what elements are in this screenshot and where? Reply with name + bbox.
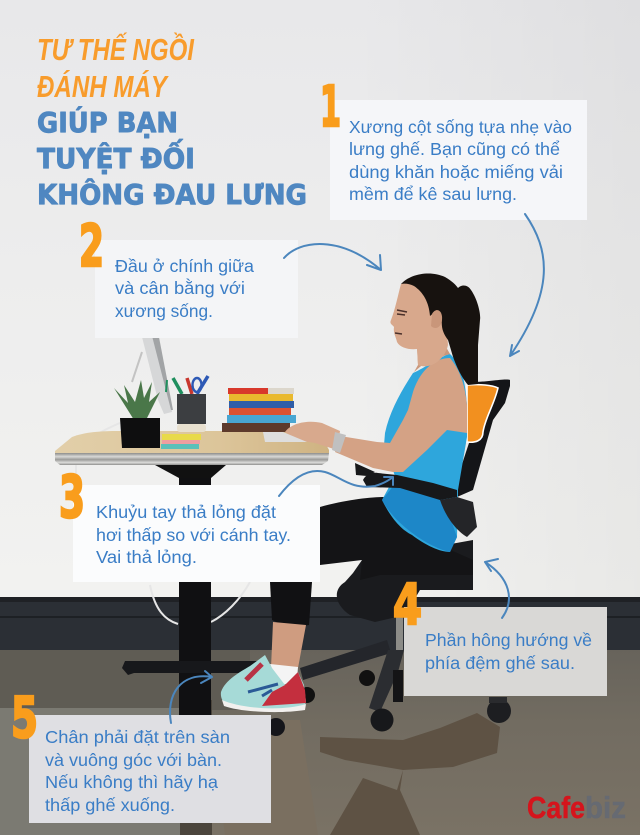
title: blue lines: KHÔNG ĐAU LƯNG: [37, 177, 307, 211]
arrow 2: [284, 244, 381, 270]
background photo: wall: [0, 0, 640, 600]
callout 2 text: xương sống.: [115, 301, 213, 321]
chair armrest: [355, 463, 457, 500]
callout 4 text: [425, 630, 592, 673]
callout 5 text: Nếu không thì hãy hạ: [45, 772, 218, 792]
logo: CafeBiz: biz: [585, 790, 626, 825]
title: blue lines: TUYỆT ĐỐI: [37, 137, 195, 175]
callout 3 text: hơi thấp so với cánh tay.: [96, 525, 291, 545]
chair wheels: [370, 708, 394, 732]
tank top: lower shade: [382, 484, 457, 552]
background photo: concrete floor: [0, 650, 640, 835]
tank top: [382, 354, 467, 552]
number 3: 3: [59, 463, 85, 531]
neck and chest: [414, 340, 450, 372]
callout 1: [320, 75, 587, 220]
number 2: 2: [79, 212, 104, 280]
background photo: baseboard: [0, 597, 640, 651]
logo: CafeBiz: Cafe: [527, 790, 585, 825]
hand: [285, 422, 340, 450]
sticky notes: [161, 434, 201, 449]
arm: [335, 358, 467, 472]
white cable behind desk: [76, 414, 250, 624]
logo: CafeBiz: [527, 790, 626, 825]
leg: calf: [271, 622, 306, 668]
callout 1 text: Xương cột sống tựa nhẹ vào: [349, 117, 572, 137]
callout 1 text: dùng khăn hoặc miếng vải: [349, 162, 563, 182]
callout 4 text: Phần hông hướng về: [425, 630, 592, 650]
eye and mouth: [395, 310, 407, 334]
callout 2 text: và cân bằng với: [115, 277, 245, 298]
callout 2: [79, 212, 298, 338]
callout 5 text: và vuông góc với bàn.: [45, 750, 222, 770]
title: blue lines: GIÚP BẠN: [37, 105, 178, 139]
chair base: [300, 640, 391, 680]
callout 3 text: [96, 502, 291, 567]
title: orange lines: TƯ THẾ NGỒI: [37, 31, 195, 67]
desk column: [179, 462, 211, 718]
callout 5 text: thấp ghế xuống.: [45, 795, 175, 815]
monitor: [132, 332, 173, 414]
callout 1 text: [349, 117, 572, 204]
callout 4 text: phía đệm ghế sau.: [425, 653, 575, 673]
callout 5: [11, 686, 271, 823]
number 5: 5: [11, 686, 38, 751]
callout 3 text: Khuỷu tay thả lỏng đặt: [96, 502, 276, 522]
callout 2 text: Đầu ở chính giữa: [115, 256, 254, 276]
callout 1 text: mềm để kê sau lưng.: [349, 184, 517, 204]
chair: [267, 379, 511, 736]
plant: [114, 380, 160, 448]
callout 5 text: [45, 727, 230, 815]
title: [37, 31, 307, 211]
callout 3 text: Vai thả lỏng.: [96, 547, 197, 567]
callout 5 text: Chân phải đặt trên sàn: [45, 727, 230, 747]
callout 1 text: lưng ghế. Bạn cũng có thể: [349, 139, 560, 159]
callout 2 text: [115, 256, 254, 321]
lumbar highlight: orange: [467, 385, 498, 442]
arrow 4: [485, 559, 509, 618]
number 4: 4: [393, 573, 422, 638]
keyboard: [263, 432, 307, 442]
callout 3: [59, 463, 320, 582]
chair reflection on floor: [320, 713, 500, 835]
arrow 1: [510, 214, 544, 356]
callout 4: [393, 573, 607, 696]
number 1: 1: [320, 75, 341, 140]
face: [390, 281, 448, 366]
person: [221, 273, 480, 712]
desk top: [55, 431, 329, 453]
desk: [55, 431, 329, 718]
chair seat: [337, 540, 473, 622]
watch: [332, 432, 346, 453]
chair back: [455, 379, 510, 497]
desk bracket: [155, 465, 226, 478]
leg: lower legging: [270, 582, 312, 626]
sock: [270, 664, 298, 686]
hair: [401, 273, 480, 385]
desk edge: [55, 453, 329, 465]
book stack: [222, 388, 296, 432]
chair arm bracket: [440, 497, 477, 537]
title: orange lines: [37, 31, 195, 104]
title: orange lines: ĐÁNH MÁY: [37, 69, 170, 104]
ear: [431, 310, 442, 328]
arrow 5: [170, 671, 212, 723]
arrow 3: [279, 471, 393, 496]
desk base foot: [122, 661, 260, 675]
shoe: [221, 655, 306, 712]
pencil cup: [166, 376, 208, 432]
title: blue lines: [37, 105, 307, 211]
leg: thigh: [320, 497, 473, 580]
